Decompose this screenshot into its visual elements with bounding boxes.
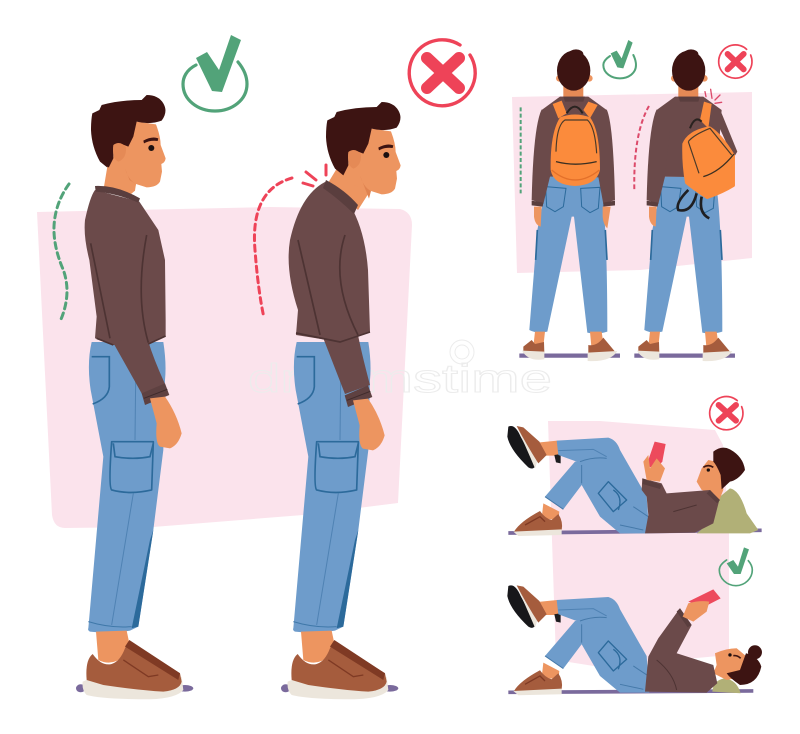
- icon: phone high: [647, 442, 666, 470]
- figure: lying on low pillow, correct: [507, 585, 762, 695]
- icon: backpack on one shoulder: [678, 102, 734, 218]
- watermark: dreamstime: [248, 357, 552, 401]
- curve: straight spine dashed green: [54, 184, 69, 319]
- figure: lying on high pillow, incorrect: [507, 426, 762, 536]
- icon: lying green check: [719, 547, 752, 586]
- watermark: [248, 340, 552, 401]
- curve: hunched spine dashed red: [254, 178, 292, 318]
- figure: man standing with correct posture: [76, 95, 193, 699]
- pillow: high: [697, 488, 758, 533]
- curve: bent back dashed red: [634, 106, 649, 189]
- icon: backpack worn correctly: [551, 101, 600, 186]
- icon: phone low: [688, 589, 721, 607]
- panel: lying pink backdrop: [548, 421, 729, 667]
- figure: back view, backpack on both shoulders: [519, 49, 620, 361]
- icon: small red cross: [719, 45, 752, 78]
- icon: lying red cross: [710, 397, 743, 430]
- icon: big green check: [183, 35, 247, 111]
- figure: man standing with hunched posture: [281, 102, 401, 699]
- pillow: low: [712, 678, 741, 693]
- panel: backpack pink backdrop: [512, 92, 752, 273]
- icon: small green check: [603, 40, 636, 78]
- figure: back view, backpack on one shoulder: [634, 49, 737, 361]
- curve: straight back dashed green: [518, 107, 524, 193]
- icon: shoulder pain marks: [705, 89, 722, 103]
- icon: neck pain marks: [303, 165, 326, 186]
- icon: big red cross: [409, 40, 475, 106]
- panel: large pink backdrop: [37, 207, 412, 528]
